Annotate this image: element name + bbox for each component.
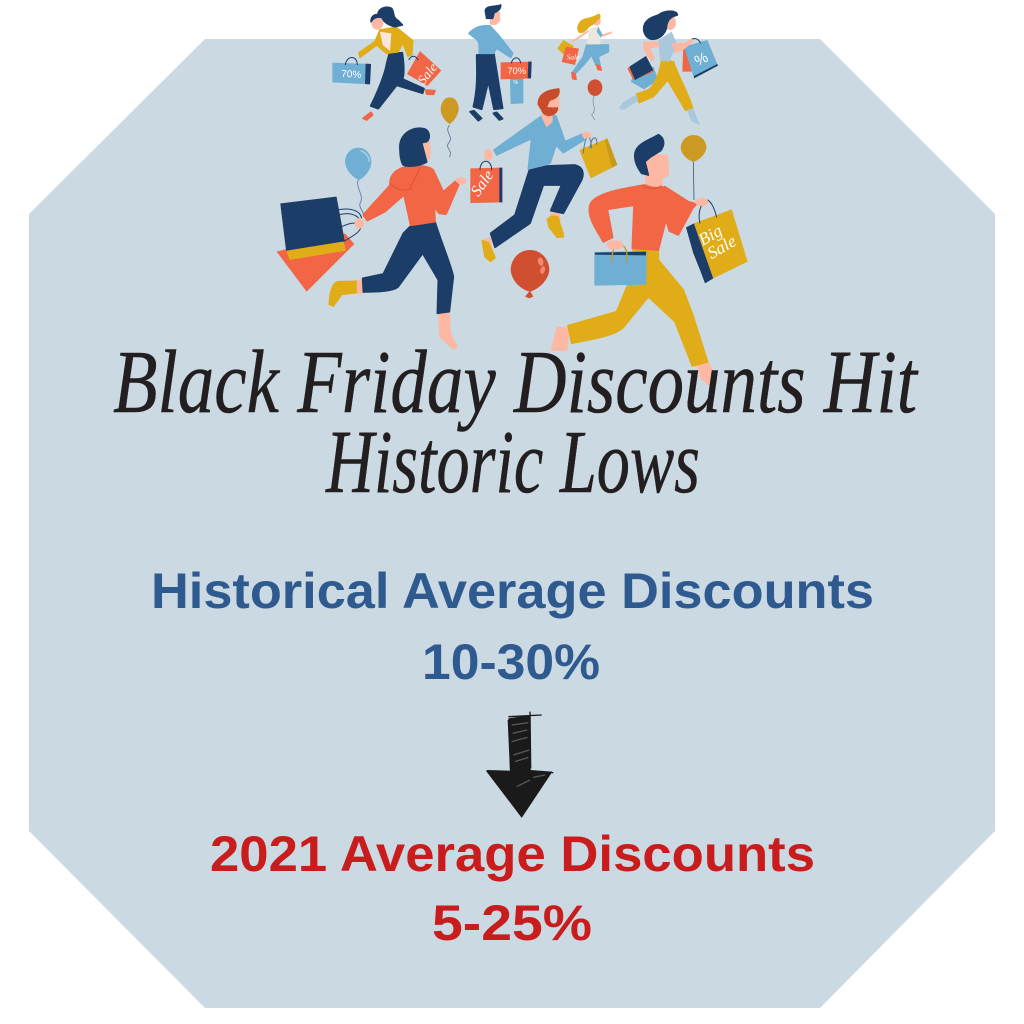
icon: gold balloon — [441, 97, 459, 157]
figure: man in blue hoodie with 70% bag — [469, 5, 532, 121]
figure: woman with yellow jacket and bags: Sale — [414, 60, 440, 87]
icon: gold balloon large — [681, 135, 706, 200]
figure: man in blue hoodie with 70% bag: % — [513, 80, 518, 86]
illustration: foreground row of large shoppers — [277, 89, 748, 388]
figure: man in blue hoodie with 70% bag: 70% — [507, 66, 526, 76]
value: historical range: 10-30% — [422, 634, 600, 690]
figure: woman with long hair and yellow pants: % — [692, 50, 711, 70]
figure: small blonde woman: Sale — [567, 52, 580, 61]
icon: red balloon — [588, 79, 602, 120]
illustration: top row of small shoppers — [332, 5, 718, 157]
figure: man in blue sweater jumping: Sale — [468, 167, 497, 200]
figure: woman in orange hoodie — [277, 128, 467, 349]
figure: man in orange sweater running: Big — [695, 221, 726, 249]
value: 2021 range: 5-25% — [432, 895, 592, 951]
figure: woman with yellow jacket and bags — [332, 7, 441, 120]
text block: historical average discounts — [151, 563, 874, 690]
icon: red balloon large — [511, 250, 549, 298]
figure: man in orange sweater running: Sale — [704, 231, 740, 263]
heading: 2021 average: 2021 Average Discounts — [210, 826, 815, 882]
arrow: hand-sketched down arrow — [487, 712, 553, 817]
figure: woman with long hair and yellow pants — [619, 11, 718, 125]
figure: woman with yellow jacket and bags: 70% — [341, 69, 362, 81]
title line 2: Historic Lows — [325, 413, 700, 512]
figure: man in blue sweater jumping — [468, 89, 617, 261]
heading: historical average: Historical Average Discounts — [151, 563, 874, 619]
title — [113, 333, 919, 512]
figure: small blonde woman — [557, 15, 612, 79]
figure: man in orange sweater running — [552, 135, 748, 388]
text block: 2021 average discounts — [210, 826, 815, 951]
icon: blue balloon — [345, 148, 371, 217]
